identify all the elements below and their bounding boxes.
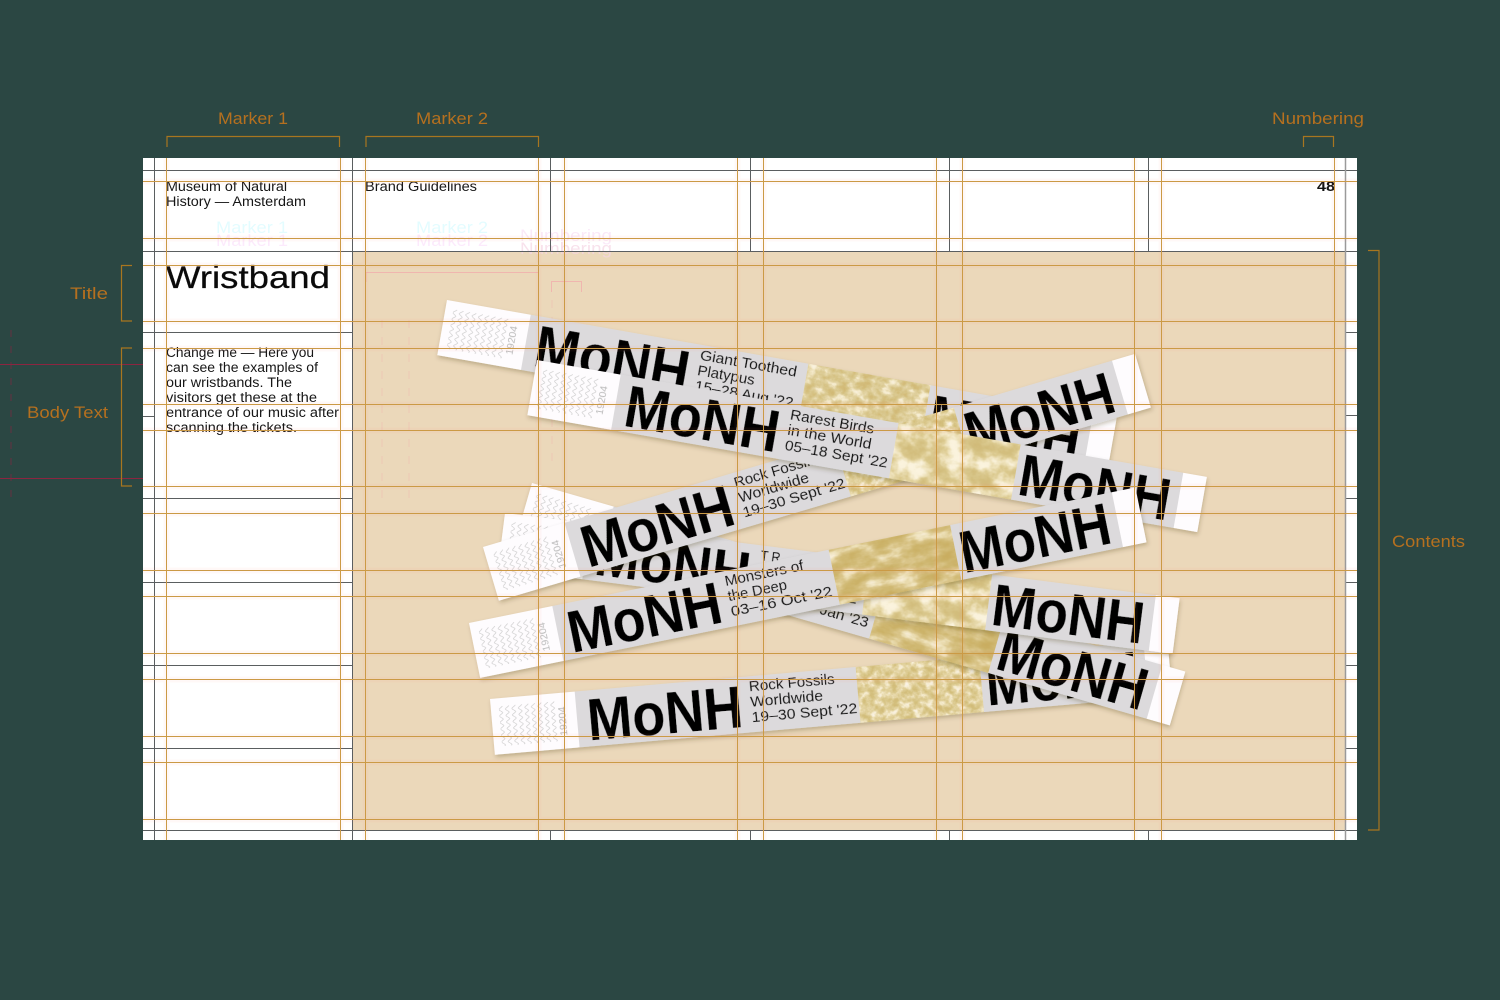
- wristband: Giant Toothed Platypus: MoNH: [924, 383, 1086, 475]
- body text: scanning the tickets.: [166, 420, 297, 435]
- wristband: Rock Fossils Worldwide, rising: MoNH: [957, 360, 1122, 467]
- wristband: Rarest Birds in the World: MoNH: [620, 373, 785, 465]
- wristband: upper crossing band: MoNH: [591, 522, 754, 607]
- label: Title: Title: [70, 285, 108, 303]
- wristband: Monsters of the Deep: 19204: [536, 621, 553, 652]
- bracket: Marker 2: [366, 136, 538, 147]
- wristband: bottom, Rock Fossils: 19–30 Sept '22: [751, 701, 858, 726]
- page number: 48: [1317, 179, 1336, 194]
- body text: visitors get these at the: [166, 390, 317, 405]
- wristband: Monsters of the Deep: MoNH: [561, 570, 728, 666]
- wristband: Rarest Birds in the World: in the World: [786, 423, 873, 453]
- wristband: Rarest Birds in the World: 05–18 Sept '22: [784, 438, 889, 472]
- wristband: Rock Fossils Worldwide, rising: [482, 351, 1153, 607]
- wristband: Rarest Birds in the World: MoNH: [1014, 442, 1176, 533]
- wristband: bottom, Rock Fossils: Rock Fossils: [748, 672, 835, 695]
- body text: our wristbands. The: [166, 375, 292, 390]
- ghost offset labels: Marker 2: [416, 219, 488, 237]
- bracket: Numbering: [1304, 136, 1334, 147]
- label: Marker 2: Marker 2: [416, 110, 488, 128]
- body text: Change me — Here you: [166, 345, 314, 360]
- wristband: Giant Toothed Platypus: MoNH: [530, 314, 695, 406]
- body text: can see the examples of: [166, 360, 318, 375]
- header: museum name: Museum of Natural: [166, 179, 287, 194]
- wristband: Rarest Birds in the World: 19204: [595, 385, 611, 416]
- wristband: Monsters of the Deep: 03–16 Oct '22: [730, 584, 834, 620]
- wristband: Monsters of the Deep: the Deep: [726, 578, 788, 605]
- panel: contents area: [352, 251, 1345, 830]
- ghost offset labels: Numbering: [520, 227, 612, 245]
- wristband: bottom, Rock Fossils: [490, 637, 1173, 762]
- bracket: Body Text: [122, 348, 132, 486]
- label: Numbering: Numbering: [1272, 110, 1364, 128]
- header: museum name: [166, 179, 306, 209]
- ghost offset labels: Marker 1: [216, 219, 288, 237]
- wristband: lower crossing band: MoNH: [990, 617, 1155, 723]
- layout guides: orange margin lines: [143, 158, 1357, 840]
- wristband: lower crossing band: Jan '23: [818, 602, 870, 631]
- wristband: upper crossing band: MoNH: [988, 572, 1148, 657]
- wristband: Giant Toothed Platypus: 15–28 Aug '22: [693, 378, 795, 412]
- wristband: Rarest Birds in the World: Rarest Birds: [789, 407, 875, 438]
- label: Contents: Contents: [1392, 533, 1465, 551]
- wristband: Giant Toothed Platypus: Giant Toothed: [699, 348, 798, 381]
- wristband: bottom, Rock Fossils: MoNH: [983, 640, 1141, 719]
- ghost offset labels: [216, 219, 612, 258]
- wristband: Rock Fossils Worldwide, rising: 19204: [550, 538, 569, 569]
- wristband: lower crossing band: MoNH: [606, 506, 774, 613]
- wristband: upper crossing band: T R: [760, 548, 781, 567]
- bracket: Marker 1: [167, 136, 340, 147]
- label: Marker 1: Marker 1: [218, 110, 288, 128]
- bracket: Title: [122, 266, 132, 321]
- wristband: Giant Toothed Platypus: 19204: [505, 325, 520, 356]
- page grid: dark column and row lines: [143, 158, 1357, 840]
- wristband: Monsters of the Deep: Monsters of: [723, 558, 806, 590]
- wristband: Rock Fossils Worldwide, rising: Rock Fossils: [732, 452, 819, 492]
- wristband: bottom, Rock Fossils: Worldwide: [750, 688, 824, 711]
- wristband: Giant Toothed Platypus: [436, 297, 1117, 480]
- wristband: Rarest Birds in the World: [526, 357, 1207, 539]
- ghost offset labels: Marker 2: [416, 232, 488, 250]
- bracket: Contents: [1368, 250, 1379, 830]
- wristband: Giant Toothed Platypus: Platypus: [696, 363, 756, 389]
- wristband: lower crossing band: [515, 480, 1186, 732]
- header: brand guidelines: Brand Guidelines: [365, 179, 477, 194]
- page sheet: [143, 158, 1357, 840]
- wristband: Rock Fossils Worldwide, rising: 19–30 Sept '22: [741, 476, 847, 521]
- wristband: Rock Fossils Worldwide, rising: Worldwide: [737, 470, 811, 507]
- body text: [166, 345, 340, 435]
- header: museum name: History — Amsterdam: [166, 194, 306, 209]
- wristband: Monsters of the Deep: MoNH: [953, 491, 1117, 586]
- title: Wristband: [166, 259, 330, 295]
- ghost offset labels: Marker 1: [216, 232, 288, 250]
- wristband: Monsters of the Deep: [468, 484, 1148, 685]
- annotation: dashed guides on backdrop: [0, 330, 143, 500]
- wristband: Rock Fossils Worldwide, rising: MoNH: [573, 473, 742, 580]
- wristband: bottom, Rock Fossils: 19204: [557, 706, 570, 736]
- wristband: bottom, Rock Fossils: MoNH: [584, 674, 746, 753]
- wristband: upper crossing band: '22: [836, 589, 858, 608]
- ghost offset brackets: [352, 272, 606, 500]
- body text: entrance of our music after: [166, 405, 340, 420]
- label: Body Text: Body Text: [27, 404, 108, 422]
- wristband: upper crossing band: [497, 510, 1180, 661]
- ghost offset labels: Numbering: [520, 240, 612, 258]
